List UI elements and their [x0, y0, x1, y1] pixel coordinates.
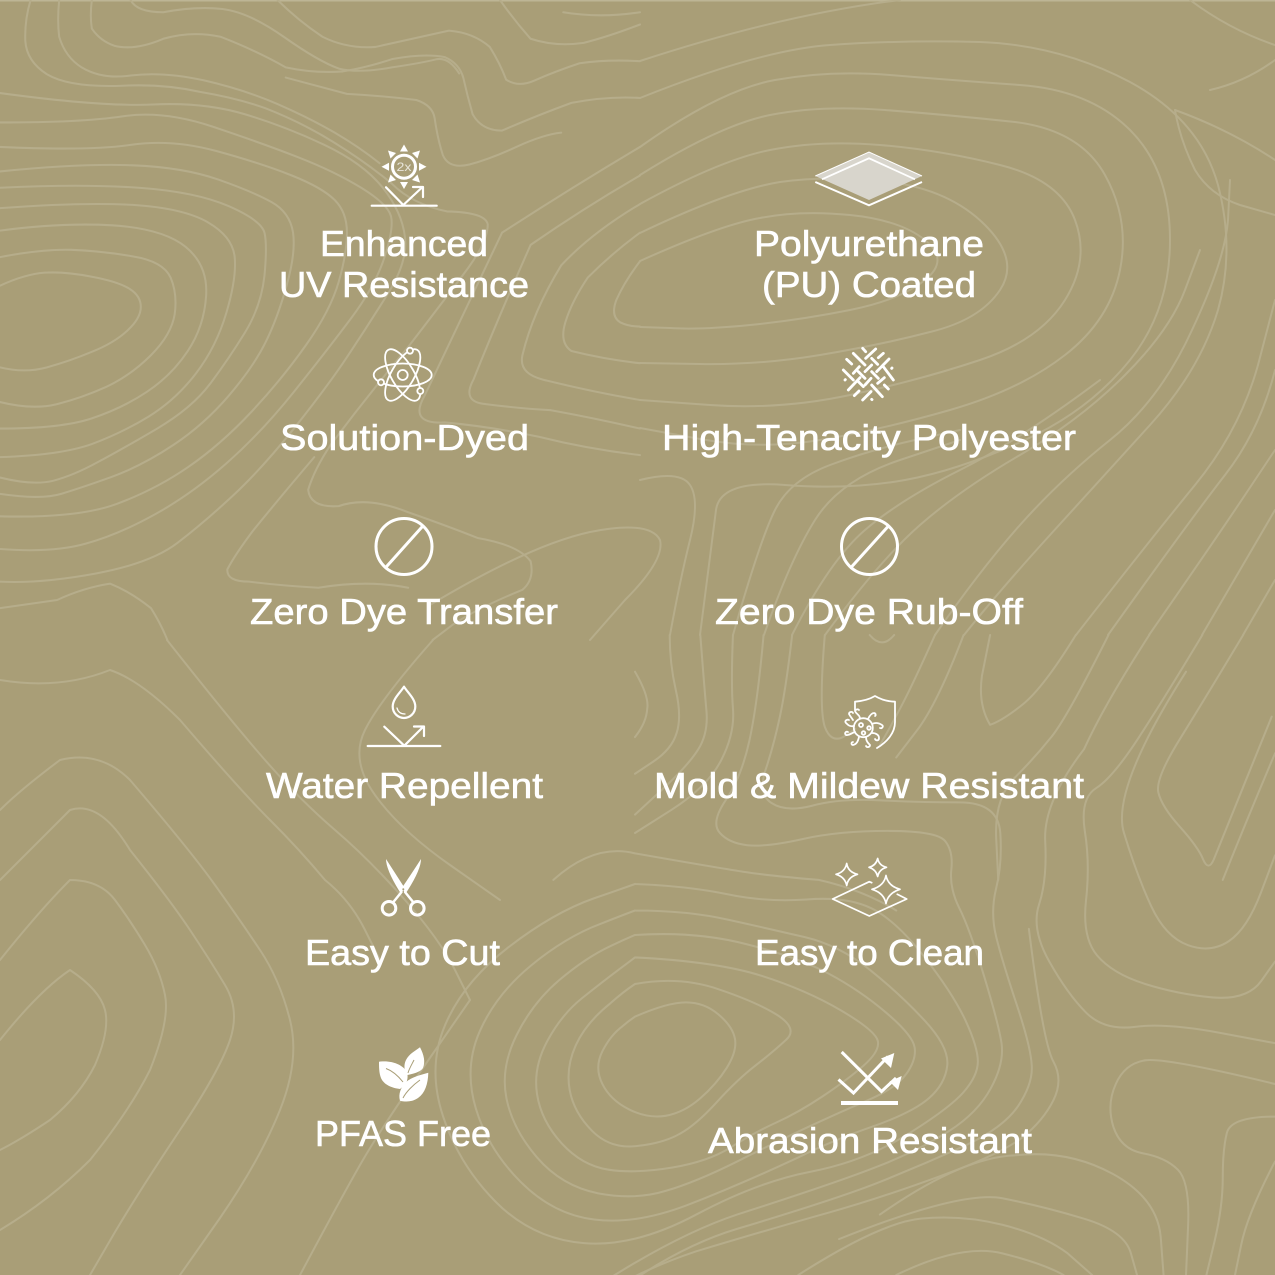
feature: Zero Dye Transfer [250, 518, 558, 632]
label: Enhanced [320, 223, 488, 264]
icon: abrasion arrows over surface [838, 1052, 902, 1105]
icon: prohibited circle [376, 518, 432, 574]
label [754, 223, 984, 305]
label [279, 223, 529, 305]
feature: Easy to Cut [305, 859, 500, 973]
feature: Enhanced UV Resistance [279, 144, 529, 305]
feature: High-Tenacity Polyester [662, 348, 1076, 458]
label: Abrasion Resistant [708, 1120, 1032, 1161]
label: High-Tenacity Polyester [662, 417, 1076, 458]
feature: Mold & Mildew Resistant [654, 696, 1084, 806]
feature: PFAS Free [315, 1047, 491, 1154]
label: UV Resistance [279, 264, 529, 305]
feature: Solution-Dyed [280, 344, 529, 458]
icon: sparkling surface [833, 858, 907, 916]
label: (PU) Coated [762, 264, 976, 305]
label: Zero Dye Rub-Off [715, 591, 1024, 632]
icon: shield with mold spore [845, 696, 895, 748]
icon: prohibited circle [842, 518, 898, 574]
feature: Easy to Clean [755, 858, 984, 973]
feature: Water Repellent [266, 687, 543, 806]
icon: sun with reflected UV ray [372, 144, 437, 206]
feature: Abrasion Resistant [708, 1052, 1032, 1161]
label: Water Repellent [266, 765, 543, 806]
icon: water drop bouncing off surface [368, 687, 440, 746]
icon: coated fabric layers [815, 152, 922, 205]
icon: atom [374, 344, 432, 406]
label: Easy to Cut [305, 932, 500, 973]
feature: Polyurethane (PU) Coated [754, 152, 984, 305]
icon: scissors [382, 859, 424, 915]
label: Solution-Dyed [280, 417, 529, 458]
icon: sun with reflected UV ray: 2x [396, 160, 412, 174]
icon: woven fibres [843, 348, 893, 400]
label: Easy to Clean [755, 932, 984, 973]
feature: Zero Dye Rub-Off [715, 518, 1024, 632]
label: PFAS Free [315, 1113, 491, 1154]
label: Polyurethane [754, 223, 984, 264]
icon: leaves [379, 1047, 428, 1101]
label: Zero Dye Transfer [250, 591, 558, 632]
label: Mold & Mildew Resistant [654, 765, 1084, 806]
